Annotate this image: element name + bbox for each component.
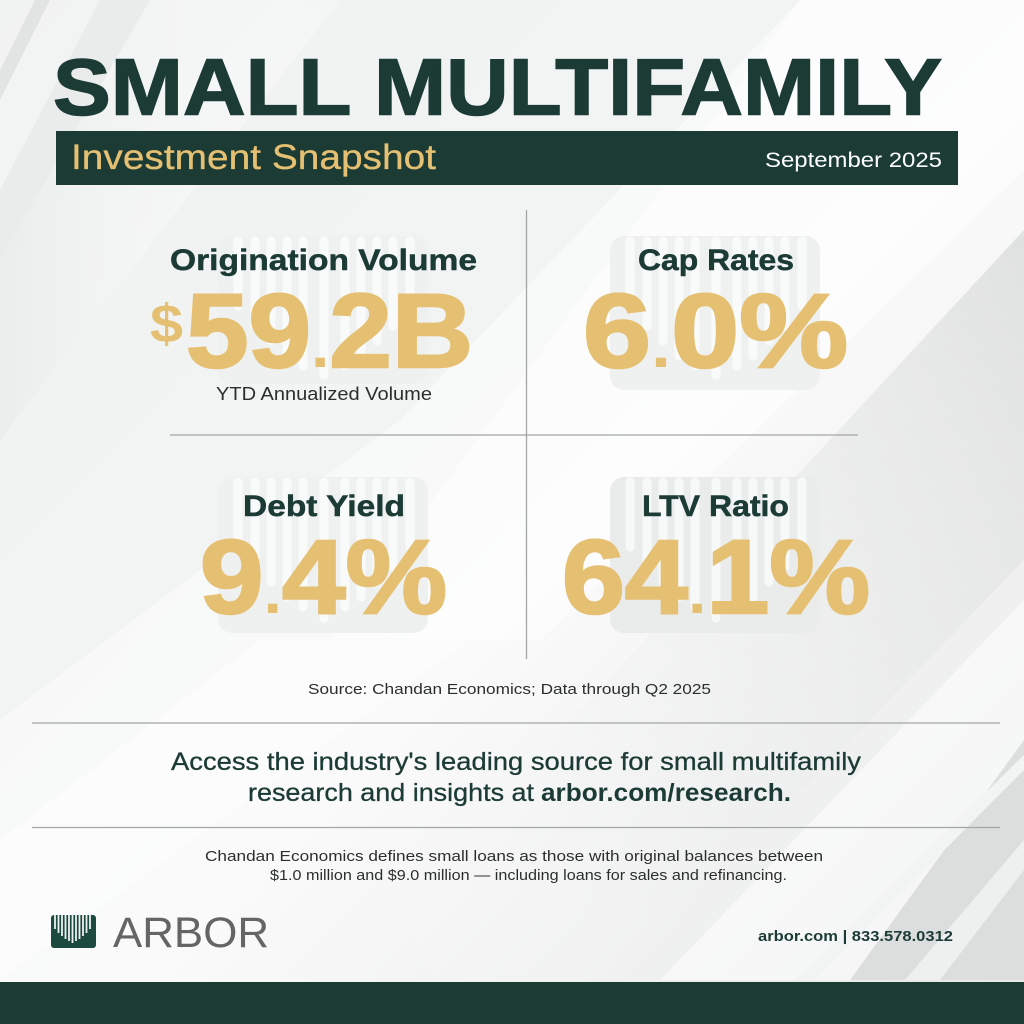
caption: YTD Annualized Volume: [216, 384, 432, 404]
call to action: Access the industry's leading source for small multifamily: [171, 748, 862, 776]
subtitle banner: [56, 131, 958, 185]
value: 9.4%: [200, 519, 447, 636]
footer bar: [0, 982, 1024, 1024]
date: September 2025: [765, 149, 942, 172]
heading: Debt Yield: [243, 490, 405, 523]
source note: Source: Chandan Economics; Data through Q2 2025: [308, 682, 711, 698]
call to action: arbor.com/research.: [541, 779, 791, 807]
logo: arbor: [51, 909, 269, 957]
metric: ltv ratio: [562, 490, 870, 636]
heading: Origination Volume: [170, 244, 477, 277]
dollar sign: $: [150, 294, 183, 354]
watermark: debt yield: [218, 477, 428, 633]
metric: origination volume: [150, 244, 477, 404]
heading: Cap Rates: [638, 244, 794, 277]
call to action: research and insights at: [248, 779, 534, 807]
definition note: Chandan Economics defines small loans as those with original balances between: [205, 848, 823, 865]
subtitle: Investment Snapshot: [71, 138, 436, 177]
icon: arbor mark: [51, 915, 96, 948]
contact details: arbor.com | 833.578.0312: [758, 928, 953, 945]
definition note: [205, 848, 823, 884]
call to action: [171, 748, 862, 807]
value: 6.0%: [583, 273, 848, 390]
metric: cap rates: [583, 244, 848, 390]
definition note: $1.0 million and $9.0 million — including loans for sales and refinancing.: [270, 867, 787, 884]
watermark: origination volume: [218, 236, 428, 384]
metric: debt yield: [200, 490, 447, 636]
watermark: cap rates: [610, 236, 820, 390]
value: 64.1%: [562, 519, 870, 636]
heading: LTV Ratio: [642, 490, 789, 523]
rule lines: [32, 723, 1000, 828]
quadrant divider lines: [170, 210, 858, 659]
title: SMALL MULTIFAMILY: [53, 42, 942, 132]
value: 59.2B: [186, 273, 473, 390]
wordmark: ARBOR: [113, 909, 269, 957]
watermark: ltv ratio: [610, 477, 820, 633]
